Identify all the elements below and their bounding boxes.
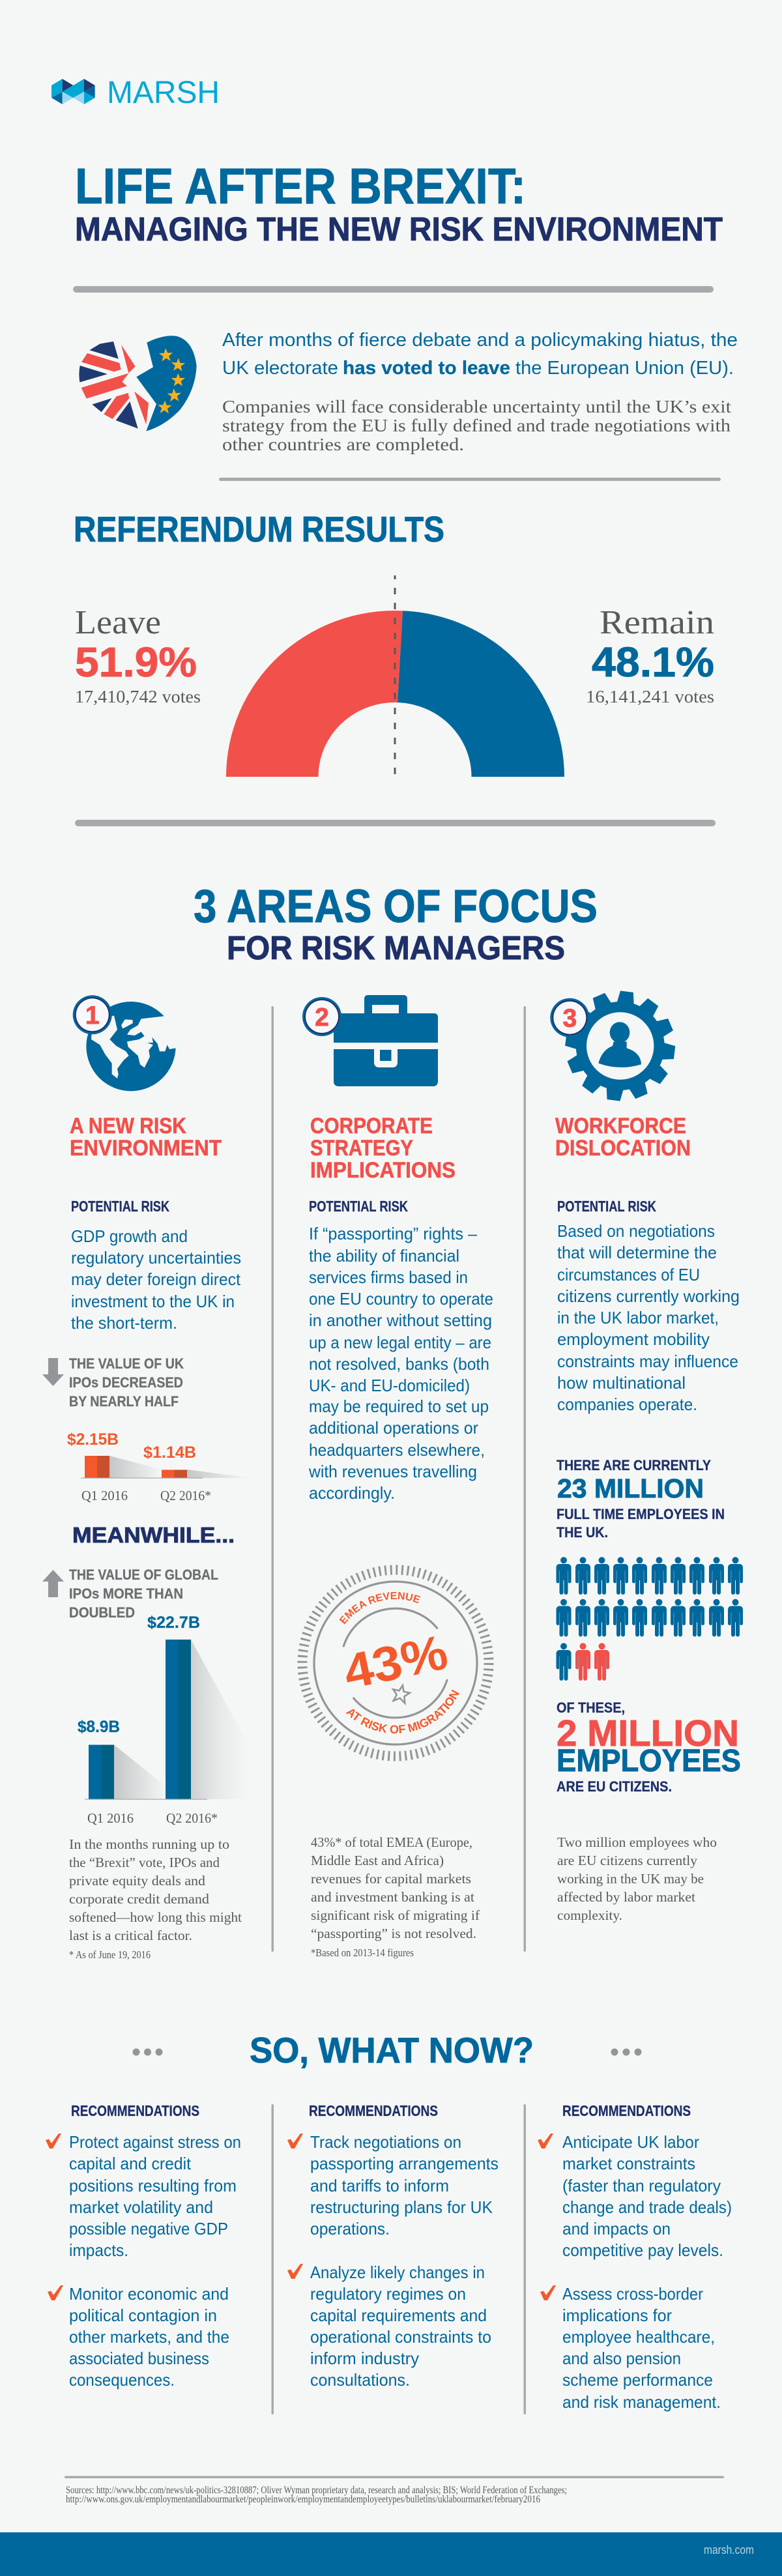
heading: WORKFORCE	[555, 1114, 686, 1138]
text block: two million: complexity.	[557, 1907, 622, 1923]
text block: two million: Two million employees who	[557, 1834, 717, 1850]
panel: recommendations 1: RECOMMENDATIONS	[71, 2102, 199, 2119]
text block: two million	[557, 1834, 717, 1923]
panel: recommendations 3	[538, 2102, 732, 2412]
leave result: Leave	[75, 604, 161, 641]
stat: 23 million: FULL TIME EMPLOYEES IN	[557, 1506, 725, 1522]
recommendation text: change and trade deals)	[562, 2197, 732, 2217]
heading: IMPLICATIONS	[310, 1158, 456, 1183]
panel: column 3, workforce dislocation	[550, 991, 743, 1923]
heading: ENVIRONMENT	[70, 1136, 222, 1161]
recommendation text: scheme performance	[562, 2370, 713, 2390]
heading: so, what now	[133, 2030, 641, 2070]
recommendation text: market constraints	[562, 2154, 695, 2173]
sources	[66, 2485, 567, 2505]
icon: check	[538, 2134, 553, 2149]
text block: risk: that will determine the	[557, 1243, 717, 1262]
icon: gear with person and number 3	[550, 991, 676, 1101]
text block: risk: circumstances of EU	[557, 1265, 700, 1284]
icon: down arrow	[42, 1358, 64, 1386]
stat: 23 million: THE UK.	[557, 1524, 608, 1541]
bar chart: UK IPOs	[67, 1430, 251, 1503]
recommendation text: political contagion in	[69, 2306, 217, 2325]
icon: briefcase with number 2	[302, 995, 438, 1086]
recommendation text	[69, 2284, 229, 2390]
recommendation text: Track negotiations on	[310, 2132, 461, 2152]
stat: 2 million: ARE EU CITIZENS.	[557, 1778, 672, 1795]
text block: months running up	[69, 1836, 242, 1961]
callout: global IPOs doubled: IPOs MORE THAN	[69, 1585, 183, 1602]
intro text	[222, 330, 738, 454]
text block: two million: are EU citizens currently	[557, 1853, 697, 1868]
bar chart: global IPOs: $22.7B	[147, 1614, 200, 1632]
text block: risk: companies operate.	[557, 1395, 697, 1414]
main heading: LIFE AFTER BREXIT:	[75, 158, 526, 214]
panel: recommendations 3: RECOMMENDATIONS	[562, 2102, 691, 2119]
remain result: Remain	[600, 604, 714, 641]
text block: risk: UK- and EU-domiciled)	[309, 1376, 470, 1395]
recommendation text: Analyze likely changes in	[310, 2263, 485, 2282]
remain result: 48.1%	[592, 639, 714, 686]
heading: DISLOCATION	[555, 1136, 691, 1161]
recommendation text: and also pension	[562, 2349, 681, 2368]
recommendation text: consultations.	[310, 2370, 410, 2390]
recommendation text: inform industry	[310, 2349, 419, 2368]
text block: risk: headquarters elsewhere,	[309, 1440, 485, 1460]
icon: briefcase with number 2: 2	[315, 1004, 329, 1032]
callout: UK IPOs decreased: IPOs DECREASED	[69, 1374, 183, 1391]
text block: EMEA: and investment banking is at	[311, 1889, 474, 1905]
chart: 43% seal: 43%	[339, 1624, 452, 1700]
icon: check	[287, 2134, 303, 2149]
text block: risk: may deter foreign direct	[71, 1269, 241, 1289]
intro text: strategy from the EU is fully defined and trade negotiations with	[222, 416, 731, 435]
bar chart: global IPOs: $8.9B	[78, 1718, 120, 1736]
text block: risk	[71, 1226, 241, 1333]
footer band	[0, 2532, 782, 2576]
bar chart: global IPOs: Q1 2016	[87, 1810, 134, 1826]
text block: risk	[557, 1221, 740, 1414]
icon: check	[48, 2285, 63, 2300]
recommendation text: (faster than regulatory	[562, 2176, 721, 2195]
text block: risk: in the UK labor market,	[557, 1308, 719, 1327]
text block: risk: regulatory uncertainties	[71, 1248, 241, 1267]
text block: risk: If “passporting” rights –	[309, 1224, 478, 1243]
text block: months running up: corporate credit demand	[69, 1891, 210, 1907]
text block: months running up: the “Brexit” vote, IPOs and	[69, 1855, 220, 1870]
icon: globe with number 1	[73, 995, 182, 1091]
icon: up arrow	[42, 1570, 64, 1597]
stat: 23 million	[557, 1457, 725, 1541]
intro text: After months of fierce debate and a policymaking hiatus, the	[222, 330, 738, 351]
icon: check	[540, 2285, 556, 2300]
text block: risk: with revenues travelling	[308, 1462, 477, 1481]
text block: risk: investment to the UK in	[71, 1292, 235, 1311]
recommendation text	[310, 2263, 491, 2390]
icon: check	[46, 2134, 61, 2149]
heading: 3 areas of focus: 3 AREAS OF FOCUS	[194, 881, 598, 933]
text block: risk: constraints may influence	[557, 1352, 738, 1371]
text block: risk: how multinational	[557, 1373, 686, 1393]
chart: people pictogram	[557, 1557, 743, 1681]
recommendation text: and risk management.	[562, 2392, 721, 2412]
recommendation text: operations.	[310, 2219, 390, 2238]
recommendation text: and impacts on	[562, 2219, 671, 2238]
recommendation text: Protect against stress on	[69, 2132, 241, 2152]
recommendation text: and tariffs to inform	[310, 2176, 449, 2195]
text block: two million: working in the UK may be	[557, 1871, 704, 1887]
bar chart: global IPOs: Q2 2016*	[166, 1810, 218, 1826]
recommendation text: capital and credit	[69, 2154, 192, 2173]
text block: risk: up a new legal entity – are	[309, 1333, 491, 1352]
label: potential risk: POTENTIAL RISK	[557, 1198, 656, 1215]
leave result: 17,410,742 votes	[75, 687, 201, 706]
panel: column 1, new risk environment	[42, 995, 261, 1961]
intro text: Companies will face considerable uncertainty until the UK’s exit	[222, 397, 732, 416]
text block: risk: one EU country to operate	[309, 1289, 493, 1309]
recommendation text	[310, 2132, 499, 2238]
text block: months running up: * As of June 19, 2016	[69, 1948, 151, 1961]
bar chart: UK IPOs: Q1 2016	[81, 1488, 128, 1503]
heading	[555, 1114, 691, 1161]
recommendation text: other markets, and the	[69, 2327, 229, 2347]
logo: Marsh	[51, 76, 220, 110]
text block: risk: the ability of financial	[309, 1246, 459, 1266]
remain result	[586, 604, 714, 706]
icon: globe with number 1: 1	[85, 1002, 100, 1030]
heading: so, what now: SO, WHAT NOW?	[250, 2030, 534, 2070]
sources: http://www.ons.gov.uk/employmentandlabourmarket/peopleinwork/employmentandemployeetypes/bulletins/uklabourmarket/february2016	[66, 2494, 540, 2505]
stat: 2 million: 2 MILLION	[557, 1713, 739, 1754]
text block: risk: not resolved, banks (both	[309, 1354, 489, 1374]
stat: 23 million: 23 MILLION	[557, 1473, 704, 1503]
bar chart: global IPOs	[78, 1614, 261, 1826]
stat: 2 million: EMPLOYEES	[557, 1744, 741, 1778]
recommendation text: market volatility and	[69, 2197, 213, 2217]
callout: UK IPOs decreased: BY NEARLY HALF	[69, 1393, 179, 1410]
bar chart: UK IPOs: $2.15B	[67, 1430, 119, 1449]
recommendation text	[562, 2132, 732, 2260]
text block: risk: may be required to set up	[309, 1397, 489, 1416]
text block: risk: additional operations or	[309, 1418, 478, 1438]
recommendation text: restructuring plans for UK	[310, 2197, 493, 2217]
text block: EMEA: *Based on 2013-14 figures	[311, 1946, 414, 1959]
recommendation text: implications for	[562, 2306, 672, 2325]
heading	[70, 1114, 222, 1161]
icon: gear with person and number 3: 3	[562, 1005, 577, 1032]
recommendation text: operational constraints to	[310, 2327, 491, 2347]
recommendation text: employee healthcare,	[562, 2327, 715, 2347]
text block: months running up: private equity deals and	[69, 1873, 206, 1889]
text block: risk: accordingly.	[309, 1483, 395, 1503]
text block: months running up: last is a critical factor.	[69, 1928, 192, 1943]
title	[75, 158, 723, 248]
icon: Marsh mark	[51, 79, 95, 104]
recommendation text: positions resulting from	[69, 2176, 237, 2195]
heading: STRATEGY	[310, 1136, 413, 1161]
subheading: MANAGING THE NEW RISK ENVIRONMENT	[75, 210, 723, 248]
semi-donut chart	[226, 575, 564, 777]
heading: referendum results: REFERENDUM RESULTS	[74, 509, 444, 549]
icon: check	[287, 2264, 303, 2279]
text block: risk: services firms based in	[309, 1267, 468, 1287]
text block: risk: Based on negotiations	[557, 1221, 715, 1241]
heading: A NEW RISK	[70, 1114, 186, 1138]
bar chart: UK IPOs: $1.14B	[143, 1443, 196, 1462]
recommendation text: regulatory regimes on	[310, 2284, 466, 2304]
callout: global IPOs doubled: DOUBLED	[69, 1604, 135, 1621]
leave result	[75, 604, 201, 706]
text block: risk: citizens currently working	[557, 1286, 740, 1306]
text block: EMEA: Middle East and Africa)	[311, 1853, 444, 1868]
intro text: UK electorate	[222, 358, 338, 379]
text block: months running up: softened—how long this might	[69, 1909, 242, 1925]
callout: UK IPOs decreased	[69, 1355, 184, 1410]
recommendation text	[562, 2284, 721, 2412]
sources: Sources: http://www.bbc.com/news/uk-politics-32810887; Oliver Wyman proprietary data, research and analysis; BIS; World Federation of Exchanges;	[66, 2485, 567, 2496]
callout: global IPOs doubled: THE VALUE OF GLOBAL	[69, 1567, 218, 1583]
chart: 43% seal	[297, 1565, 494, 1761]
heading: meanwhile: MEANWHILE...	[72, 1523, 235, 1547]
label: potential risk: POTENTIAL RISK	[71, 1198, 169, 1215]
text block: EMEA: “passporting” is not resolved.	[311, 1926, 476, 1941]
heading	[310, 1114, 456, 1183]
panel: recommendations 1	[46, 2102, 241, 2390]
recommendation text: passporting arrangements	[310, 2154, 499, 2173]
panel: column 2, corporate strategy implications	[297, 995, 494, 1959]
chart: 43% seal: AT RISK OF MIGRATION	[345, 1689, 459, 1733]
recommendation text: possible negative GDP	[69, 2219, 228, 2238]
logo wordmark: MARSH	[107, 76, 220, 110]
bar chart: UK IPOs: Q2 2016*	[160, 1488, 211, 1503]
text block: risk: the short-term.	[71, 1313, 177, 1333]
intro text: has voted to leave	[343, 358, 510, 379]
recommendation text: capital requirements and	[310, 2306, 487, 2325]
text block: risk: employment mobility	[557, 1329, 710, 1349]
text block: EMEA: 43%* of total EMEA (Europe,	[311, 1834, 472, 1850]
text block: two million: affected by labor market	[557, 1889, 695, 1905]
text block: risk: GDP growth and	[71, 1226, 188, 1246]
stat: 23 million: THERE ARE CURRENTLY	[557, 1457, 711, 1473]
text block: risk	[308, 1224, 493, 1503]
text block: EMEA	[311, 1834, 480, 1959]
footer band: marsh.com	[704, 2543, 754, 2556]
recommendation text: associated business	[69, 2349, 209, 2368]
panel: recommendations 2: RECOMMENDATIONS	[309, 2102, 438, 2119]
text block: risk: in another without setting	[309, 1310, 492, 1330]
recommendation text	[69, 2132, 241, 2260]
chart: 43% seal: EMEA REVENUE	[339, 1592, 421, 1624]
recommendation text: Monitor economic and	[69, 2284, 229, 2304]
recommendation text: Anticipate UK labor	[562, 2132, 699, 2152]
intro text: other countries are completed.	[222, 435, 464, 454]
recommendation text: Assess cross-border	[562, 2284, 703, 2304]
label: potential risk: POTENTIAL RISK	[309, 1198, 408, 1215]
intro text: the European Union (EU).	[515, 358, 734, 379]
callout: global IPOs doubled	[69, 1567, 218, 1621]
remain result: 16,141,241 votes	[586, 687, 714, 706]
text block: months running up: In the months running up to	[69, 1836, 229, 1852]
leave result: 51.9%	[75, 639, 197, 686]
heading: 3 areas of focus: FOR RISK MANAGERS	[227, 929, 565, 966]
recommendation text: consequences.	[69, 2370, 175, 2390]
callout: UK IPOs decreased: THE VALUE OF UK	[69, 1355, 184, 1372]
recommendation text: impacts.	[69, 2240, 128, 2260]
text block: EMEA: significant risk of migrating if	[311, 1907, 480, 1923]
text block: EMEA: revenues for capital markets	[311, 1871, 471, 1887]
heading: CORPORATE	[310, 1114, 433, 1138]
stat: 2 million	[557, 1700, 741, 1795]
heading: 3 areas of focus	[194, 881, 598, 966]
recommendation text: competitive pay levels.	[562, 2240, 723, 2260]
panel: recommendations 2	[287, 2102, 499, 2390]
icon: broken heart UK and EU flags	[79, 336, 197, 431]
stat: 2 million: OF THESE,	[557, 1700, 625, 1716]
